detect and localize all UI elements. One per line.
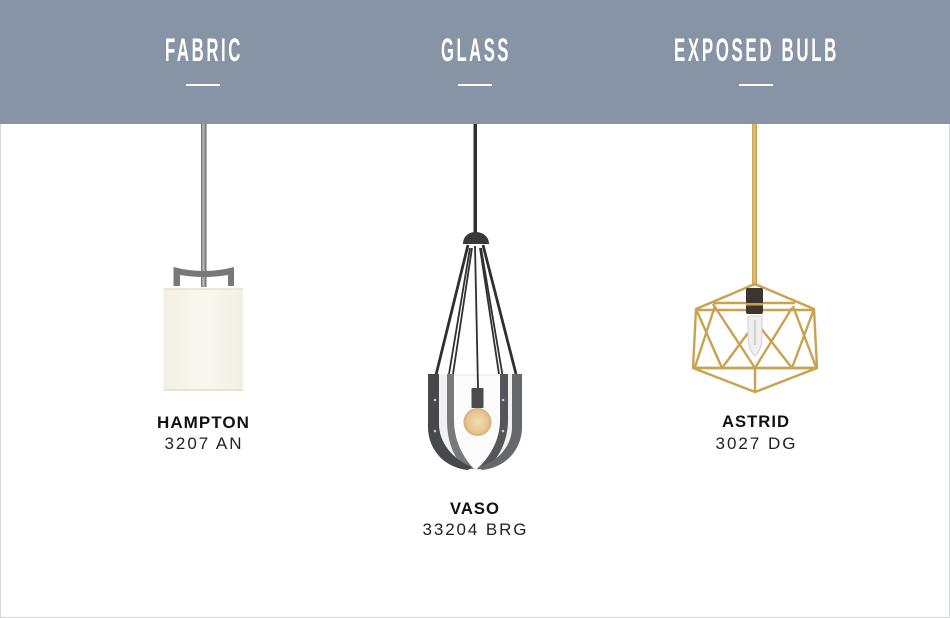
label: Vaso: VASO [450, 500, 500, 518]
glass bowl [428, 374, 522, 470]
heading: fabric [165, 32, 243, 86]
heading: fabric: FABRIC [165, 32, 243, 68]
header band [0, 0, 950, 124]
label: Astrid [716, 413, 796, 453]
socket [746, 288, 763, 314]
label: Astrid: ASTRID [722, 413, 790, 431]
socket [472, 388, 484, 408]
label: Vaso: 33204 BRG [422, 520, 526, 539]
canopy [463, 232, 489, 244]
heading: glass: GLASS [441, 32, 511, 68]
label: Hampton: 3207 AN [164, 434, 242, 453]
label: Astrid: 3027 DG [716, 434, 796, 453]
label: Hampton: HAMPTON [157, 414, 250, 432]
suspension arms [434, 245, 516, 388]
label: Hampton [157, 414, 250, 453]
label: Vaso [422, 500, 526, 539]
heading: glass [441, 32, 511, 86]
pendant: Vaso glass lamp [428, 124, 522, 470]
pendant: Astrid exposed bulb lamp [693, 124, 817, 392]
bulb [748, 316, 762, 356]
cage [693, 284, 817, 392]
pendant: Hampton fabric lamp [164, 124, 243, 391]
bulb [464, 408, 492, 436]
bands [447, 374, 474, 469]
